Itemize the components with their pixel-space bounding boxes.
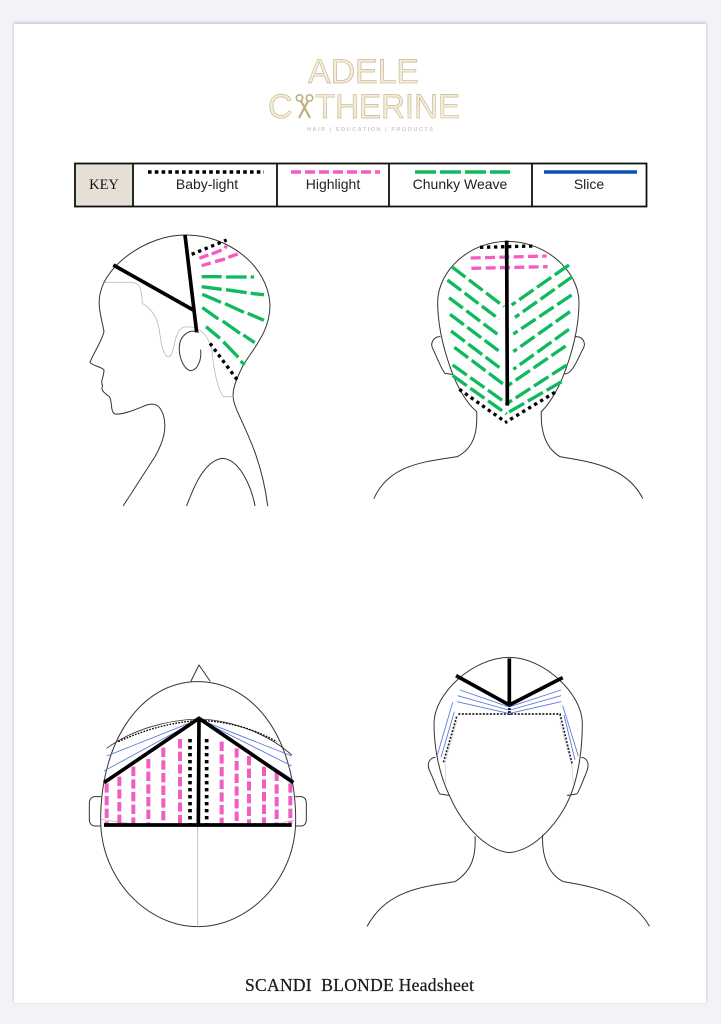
key item: highlight: Highlight [306, 176, 360, 192]
nose marker [191, 665, 210, 681]
logo: Adele Catherine [268, 53, 460, 133]
ear [179, 331, 201, 371]
chunky weave lines [447, 267, 507, 414]
diagram: side profile head [90, 235, 270, 506]
key item: highlight [291, 172, 380, 192]
highlight lines [107, 739, 290, 825]
key item: baby-light [148, 172, 264, 192]
neck and shoulders [367, 835, 649, 926]
logo word: ADELE: ADELE [308, 53, 419, 91]
key label cell [75, 164, 133, 206]
slice lines [104, 719, 293, 781]
logo word: THERINE: THERINE [315, 88, 460, 126]
logo letter: C: C [268, 88, 293, 126]
baby-light lines [443, 714, 572, 763]
logo tagline: HAIR | EDUCATION | PRODUCTS [307, 127, 433, 133]
head and shoulders outline [374, 241, 643, 498]
key item: slice [544, 172, 637, 192]
face outline [434, 657, 582, 853]
hairline [105, 282, 233, 397]
diagram: front of head [367, 657, 649, 926]
hairline [445, 722, 573, 783]
baby-light lines [192, 240, 237, 380]
diagram: top of head [89, 665, 306, 927]
key item: baby-light: Baby-light [176, 176, 238, 192]
profile outline [90, 235, 270, 506]
centre guide [101, 819, 296, 927]
chunky weave lines [202, 277, 264, 365]
ears [432, 337, 584, 374]
key item: chunky weave: Chunky Weave [413, 176, 508, 192]
icon: scissors [296, 95, 313, 118]
crown arc [107, 719, 292, 755]
baby-light arcs [118, 721, 277, 742]
baby-light lines [190, 739, 207, 825]
diagram: back of head [374, 241, 643, 498]
section line [501, 241, 513, 406]
head outline [101, 682, 296, 927]
slice lines [437, 690, 578, 760]
key item: slice: Slice [574, 176, 604, 192]
section lines [113, 235, 197, 332]
baby-light lines [459, 246, 555, 423]
highlight lines [471, 256, 548, 268]
section lines [456, 658, 563, 705]
key table [75, 164, 646, 206]
key label cell: KEY [89, 177, 119, 193]
ears [428, 757, 588, 795]
ears [89, 797, 306, 826]
title: SCANDI BLONDE Headsheet [245, 975, 474, 995]
highlight lines [199, 246, 238, 266]
section lines [104, 718, 293, 825]
shoulder [187, 458, 255, 506]
